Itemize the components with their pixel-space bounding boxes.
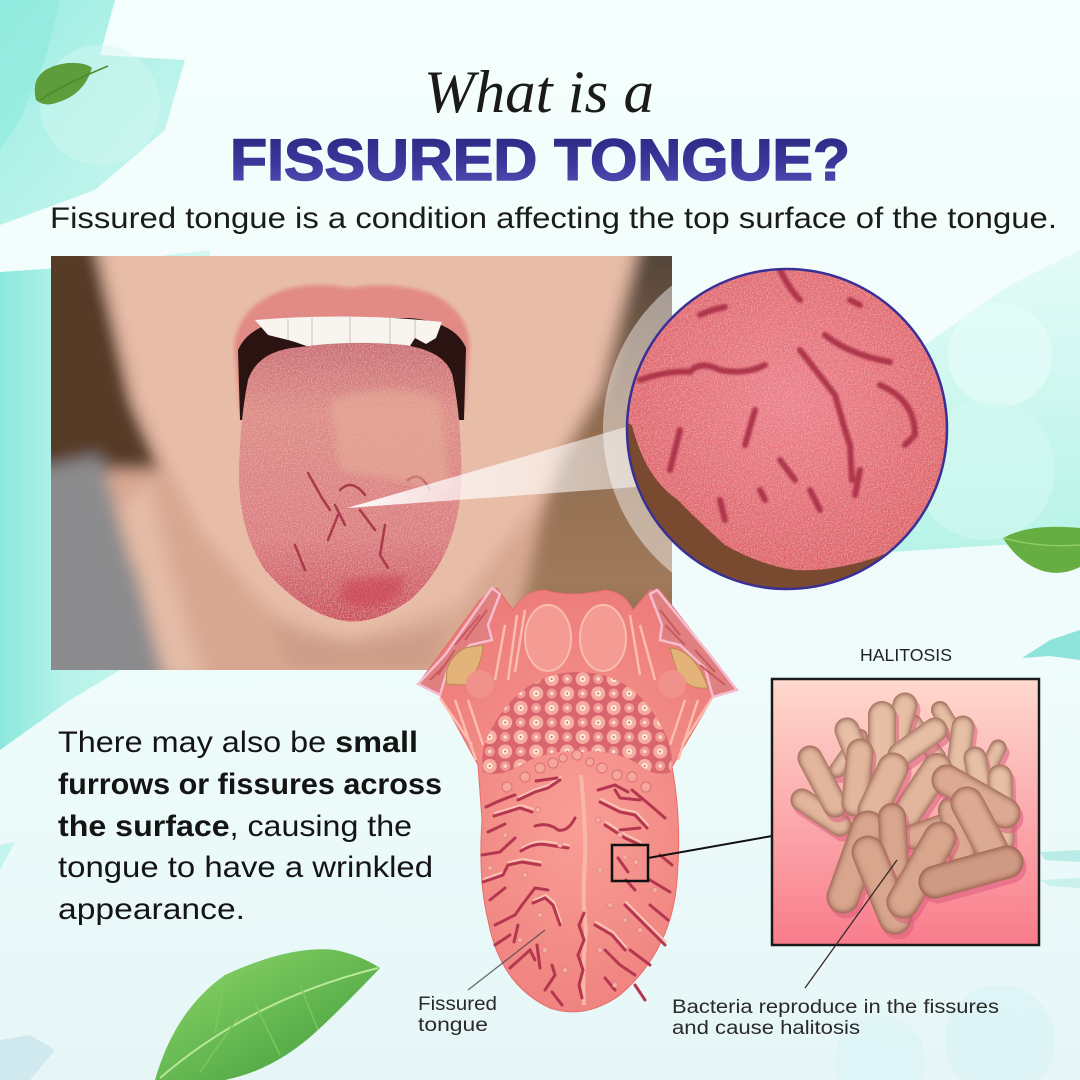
pointer to fissure (468, 930, 545, 990)
light beam (347, 424, 636, 508)
pointer to bacteria (805, 860, 897, 988)
label: halitosis: HALITOSIS (860, 645, 952, 665)
leader line to halitosis box (648, 836, 772, 858)
fissure highlights (484, 777, 666, 947)
label: fissured tongue (418, 994, 497, 1036)
label: bacteria caption: Bacteria reproduce in the fissures (672, 997, 999, 1018)
magnified tongue lens (620, 260, 960, 589)
small bumps (488, 808, 658, 988)
side glands (418, 588, 737, 698)
label: fissured tongue: tongue (418, 1015, 488, 1036)
body text (58, 726, 442, 926)
label: bacteria caption: and cause halitosis (672, 1018, 860, 1039)
muscle stripes (440, 610, 712, 760)
root lobes (525, 605, 626, 671)
zoom halo (603, 286, 672, 572)
tongue (239, 343, 461, 622)
mouth (234, 285, 470, 420)
tongue outline (418, 588, 737, 1012)
photo: woman showing fissured tongue (51, 256, 672, 670)
fissures (482, 778, 672, 1005)
papillae dome (482, 672, 672, 774)
body text: tongue to have a wrinkled (58, 851, 433, 884)
title: FISSURED TONGUE? (230, 128, 850, 193)
tongue fissures (295, 473, 430, 570)
icon: small green leaf top-left (35, 63, 108, 104)
subtitle: Fissured tongue is a condition affecting the top surface of the tongue. (50, 202, 1057, 235)
bacteria box (772, 679, 1039, 945)
selection square (612, 845, 648, 881)
icon: leaf right edge (1003, 527, 1080, 573)
body text: the surface , causing the (58, 810, 412, 843)
icon: large leaf bottom (155, 949, 380, 1080)
ringed papillae row (502, 750, 651, 792)
tongue anatomy illustration (418, 588, 737, 1012)
central groove (581, 775, 586, 1005)
label: fissured tongue: Fissured (418, 994, 497, 1015)
title: What is a (424, 59, 654, 125)
title (230, 59, 850, 193)
body text: furrows or fissures across (58, 768, 442, 801)
body text: There may also be small (58, 726, 418, 759)
label: bacteria caption (672, 997, 999, 1039)
body text: appearance. (58, 893, 245, 926)
